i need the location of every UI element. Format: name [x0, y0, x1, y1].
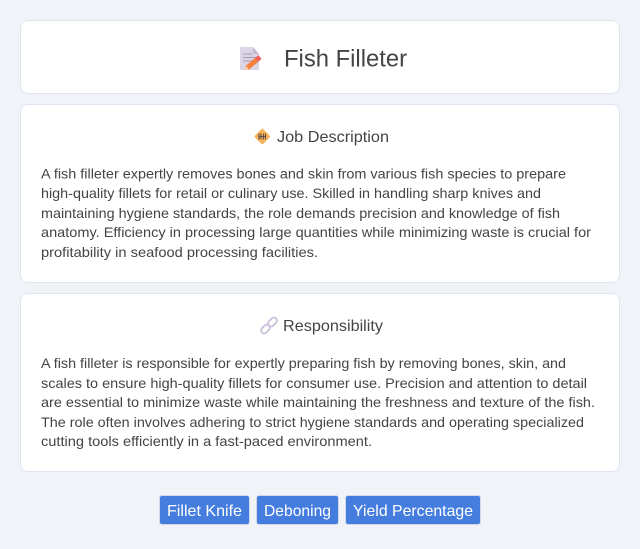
text: job description body: maintaining hygiene standards, the role demands precision and knowledge of fish: [41, 205, 560, 221]
text: job description body: anatomy. Efficiency in processing large quantities while minimizing waste is crucial for: [41, 224, 591, 240]
heading: Job Description: Job Description: [277, 129, 389, 146]
tag: Fillet Knife: [159, 495, 250, 525]
panel: job description: [20, 104, 620, 283]
icon: document with pencil: [240, 47, 260, 70]
text: responsibility body: A fish filleter is responsible for expertly preparing fish by removing bones, skin, and: [41, 355, 566, 371]
text: job description body: high-quality fillets for retail or culinary use. Skilled in handling sharp knives and: [41, 185, 541, 201]
tag: Yield Percentage: Yield Percentage: [353, 503, 473, 520]
text: job description body: [41, 166, 591, 260]
heading: Responsibility: Responsibility: [283, 318, 383, 335]
text: responsibility body: [41, 355, 595, 449]
text: job description body: profitability in seafood processing facilities.: [41, 244, 318, 260]
text: responsibility body: are essential to minimize waste while maintaining the freshness and texture of the fish.: [41, 394, 595, 410]
tag: Yield Percentage: [345, 495, 481, 525]
text: responsibility body: cutting tools efficiently in a fast-paced environment.: [41, 433, 372, 449]
text: responsibility body: The role often involves adhering to strict hygiene standards and operating specialized: [41, 414, 584, 430]
text: job description body: A fish filleter expertly removes bones and skin from various fish species to prepare: [41, 166, 566, 182]
heading: Fish Filleter: Fish Filleter: [284, 46, 407, 72]
tag: Deboning: Deboning: [264, 503, 331, 520]
icon: orange diamond sign: [254, 128, 271, 145]
panel: title: [20, 20, 620, 94]
tag: Fillet Knife: Fillet Knife: [167, 503, 242, 520]
icon: chain link: [260, 316, 278, 335]
tag: Deboning: [256, 495, 339, 525]
text: responsibility body: scales to ensure high-quality fillets for consumer use. Precision and attention to detail: [41, 375, 587, 391]
panel: responsibility: [20, 293, 620, 472]
